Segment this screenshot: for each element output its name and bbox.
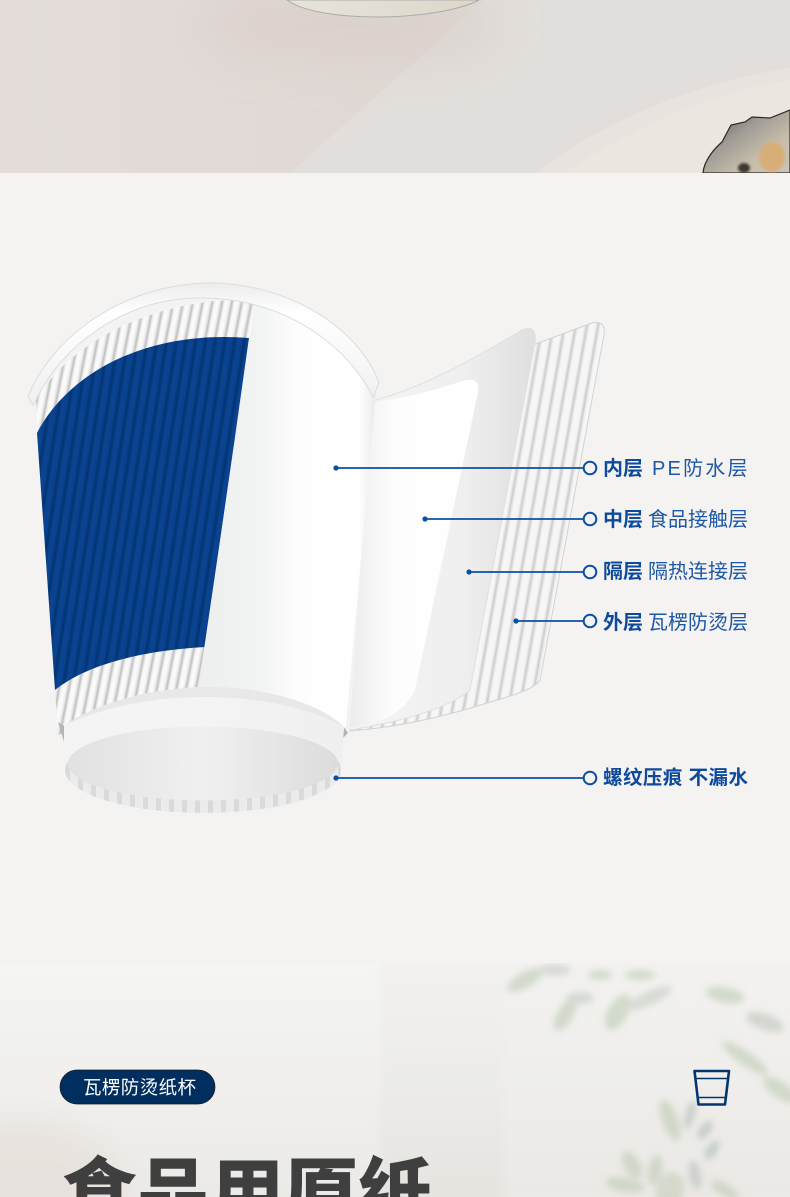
cup white inner wall	[198, 303, 376, 735]
icon: paper cup	[694, 1071, 729, 1104]
base band shading	[64, 687, 344, 727]
callout: insulation layer	[466, 560, 748, 583]
blurred leaves	[504, 963, 790, 1197]
callout: outer layer	[513, 611, 748, 634]
callout: middle layer: 食品接触层	[648, 508, 748, 531]
top photo: table with bowl and plate	[0, 0, 790, 173]
callout: outer layer: 外层	[603, 611, 643, 634]
badge pill: 瓦楞防烫纸杯	[83, 1077, 196, 1098]
blue print area	[37, 337, 249, 690]
bowl	[287, 0, 479, 17]
callout: middle layer: 中层	[603, 508, 643, 531]
callout: thread seal: 螺纹压痕 不漏水	[603, 766, 748, 789]
bottom photo background with foliage	[0, 955, 790, 1197]
oyster	[703, 110, 790, 173]
base band	[64, 687, 344, 814]
outer corrugated layer	[350, 322, 604, 731]
plate	[537, 68, 790, 173]
callout: insulation layer: 隔热连接层	[648, 560, 748, 583]
callout: outer layer: 瓦楞防烫层	[648, 611, 748, 634]
callout: thread seal	[333, 766, 748, 789]
base disk	[68, 726, 338, 800]
corner shadow right	[343, 727, 348, 738]
callout: inner layer: 内层	[603, 457, 643, 480]
callout: middle layer	[422, 508, 748, 531]
callout: insulation layer: 隔层	[603, 560, 643, 583]
inner white layer	[350, 380, 478, 728]
middle gray layer	[350, 328, 535, 730]
cup rim	[28, 283, 379, 405]
middle panel background	[0, 173, 790, 963]
cup exploded diagram	[28, 283, 604, 814]
callout lines	[333, 457, 750, 789]
callout: inner layer: PE防水层	[652, 457, 750, 480]
base recess	[65, 727, 341, 813]
corner shadow left	[58, 722, 64, 742]
callout: inner layer	[333, 457, 750, 480]
badge pill	[60, 1070, 215, 1104]
cup body corrugated wall	[36, 300, 256, 735]
